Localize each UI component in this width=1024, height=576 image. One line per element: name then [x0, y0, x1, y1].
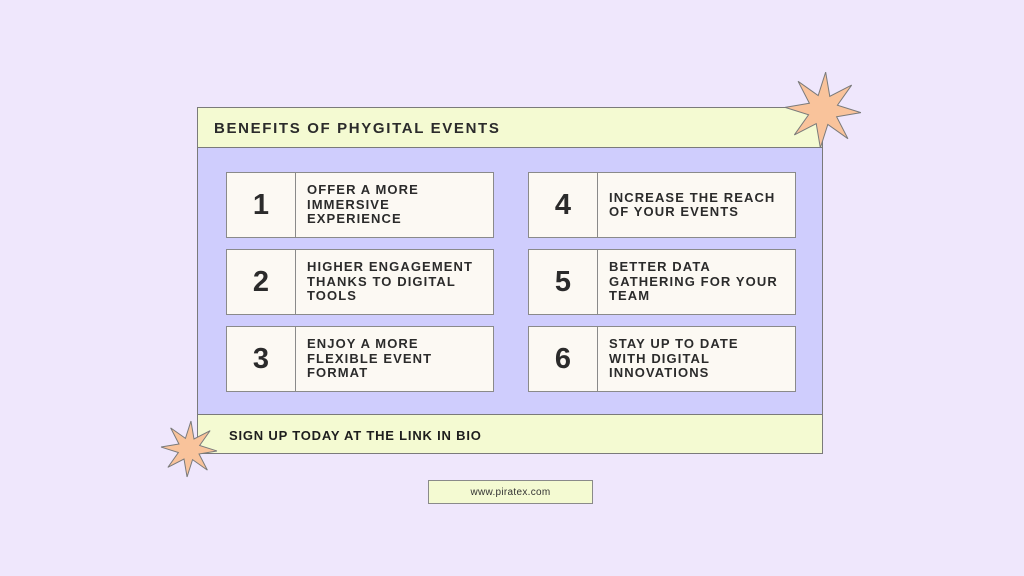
url box	[428, 480, 593, 504]
card 1: OFFER A MORE	[307, 182, 419, 197]
card 2: TOOLS	[307, 288, 357, 303]
card 1: 1	[253, 188, 269, 220]
card 5: GATHERING FOR YOUR	[609, 274, 778, 289]
card 4	[528, 172, 796, 238]
card 4: INCREASE THE REACH	[609, 190, 775, 204]
card 6: STAY UP TO DATE	[609, 336, 739, 351]
card 1: IMMERSIVE	[307, 197, 390, 212]
panel: main	[197, 107, 823, 454]
url box: www.piratex.com	[470, 486, 551, 498]
card 1	[226, 172, 494, 238]
card 3: FORMAT	[307, 365, 368, 380]
card 2: THANKS TO DIGITAL	[307, 274, 456, 289]
card 5: TEAM	[609, 288, 650, 303]
card 6: 6	[555, 342, 571, 374]
footer text: SIGN UP TODAY AT THE LINK IN BIO	[229, 428, 482, 443]
card 3: ENJOY A MORE	[307, 336, 419, 351]
card 6	[528, 326, 796, 392]
card 5: 5	[555, 266, 571, 298]
footer bar	[198, 414, 822, 453]
card 2: 2	[253, 266, 269, 298]
card 6: INNOVATIONS	[609, 365, 709, 380]
card 2	[226, 249, 494, 315]
card 3: FLEXIBLE EVENT	[307, 351, 432, 366]
title: BENEFITS OF PHYGITAL EVENTS	[214, 120, 501, 137]
card 1: EXPERIENCE	[307, 211, 402, 226]
card 5: BETTER DATA	[609, 259, 711, 274]
card 3: 3	[253, 342, 269, 374]
card 6: WITH DIGITAL	[609, 351, 710, 366]
icon: small star	[159, 419, 219, 479]
card 5	[528, 249, 796, 315]
card 4: OF YOUR EVENTS	[609, 204, 739, 219]
card 4: 4	[555, 188, 571, 220]
card 2: HIGHER ENGAGEMENT	[307, 259, 473, 274]
card 3	[226, 326, 494, 392]
header bar	[198, 108, 822, 148]
icon: big star	[782, 69, 864, 151]
